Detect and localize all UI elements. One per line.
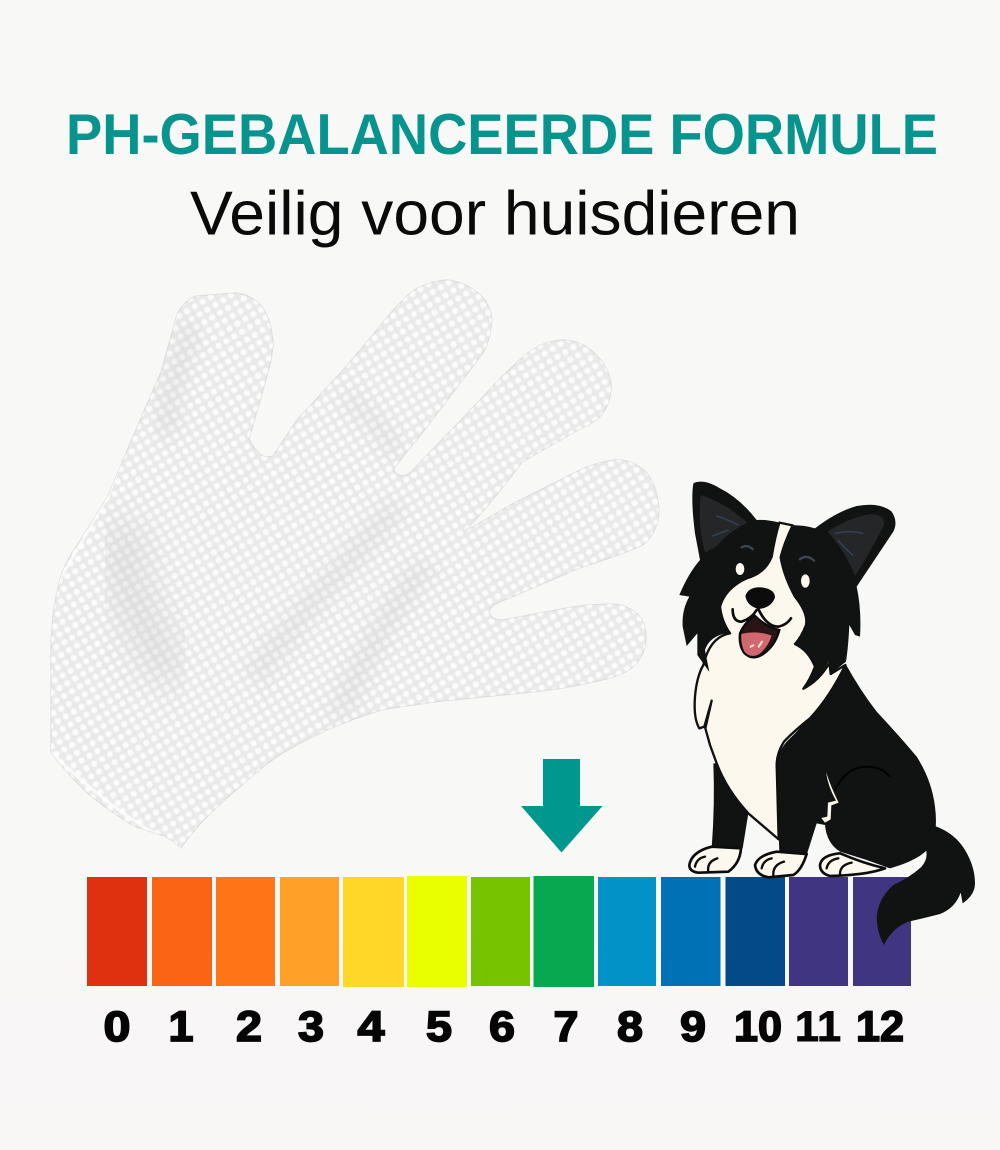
pH scale numbers: 12 <box>856 1003 904 1051</box>
pH scale numbers: 5 <box>426 1003 452 1051</box>
pH scale numbers: 0 <box>104 1003 130 1051</box>
pH scale numbers: 4 <box>358 1003 385 1051</box>
pH colour scale <box>87 876 911 987</box>
dog thigh line <box>835 767 890 790</box>
pH scale numbers: 10 <box>734 1003 782 1051</box>
glove wipe <box>40 270 670 860</box>
pH scale numbers: 2 <box>236 1003 262 1051</box>
title: PH-GEBALANCEERDE FORMULE <box>66 103 938 167</box>
dog ear creases <box>713 516 863 555</box>
pH arrow <box>521 759 602 852</box>
dog paws <box>689 847 885 877</box>
dog illustration <box>679 482 975 945</box>
dog nose <box>745 587 775 609</box>
pH scale numbers: 9 <box>680 1003 706 1051</box>
dog head fur <box>679 482 779 672</box>
dog fur strip between leg and hip <box>821 772 839 823</box>
glove bright rim <box>51 315 181 848</box>
dog tongue <box>741 632 772 656</box>
dog mouth <box>740 616 779 657</box>
dog eyes <box>736 563 744 575</box>
pH scale numbers: 8 <box>617 1003 643 1051</box>
dog right head fur and ear <box>781 505 895 689</box>
subtitle: Veilig voor huisdieren <box>190 180 800 248</box>
pH scale numbers: 1 <box>168 1003 194 1051</box>
dog body <box>777 664 936 868</box>
dog eyebrows <box>742 546 814 561</box>
pH scale numbers: 7 <box>554 1003 578 1051</box>
dog inner ears <box>700 495 747 553</box>
dog toes <box>695 857 852 875</box>
pH scale numbers <box>104 1003 904 1051</box>
pH scale numbers: 6 <box>489 1003 515 1051</box>
dog front leg <box>712 763 748 848</box>
dog tail <box>877 826 975 945</box>
pH scale numbers: 3 <box>298 1003 324 1051</box>
glove dot texture <box>40 270 670 860</box>
dog smile <box>733 609 791 627</box>
dog white chest and face <box>695 523 845 839</box>
pH scale numbers: 11 <box>795 1003 841 1051</box>
infographic canvas <box>50 114 975 1042</box>
glove fold shading <box>125 330 422 710</box>
